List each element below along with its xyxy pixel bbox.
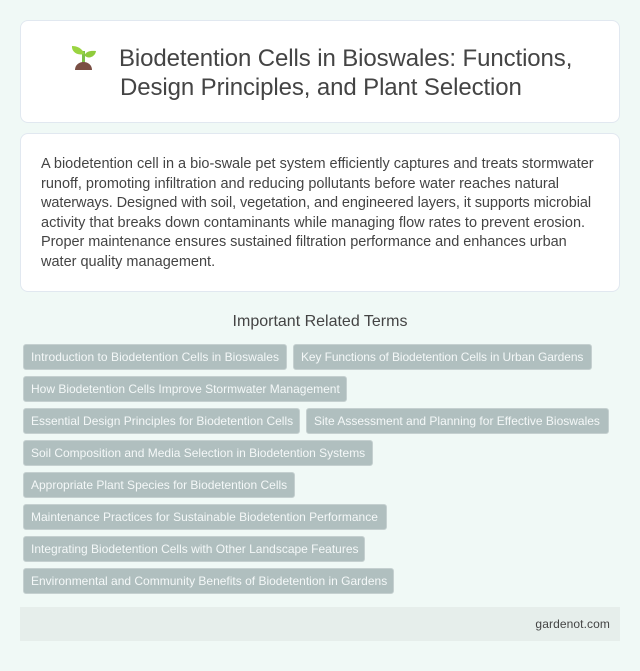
- chip: Integrating Biodetention Cells with Other Landscape Features: [31, 542, 359, 556]
- chip: [23, 568, 394, 594]
- chip: Introduction to Biodetention Cells in Bioswales: [31, 350, 279, 364]
- chip: [23, 344, 287, 370]
- header card: [20, 20, 620, 123]
- chip: [23, 472, 295, 498]
- chip: [23, 376, 347, 402]
- intro paragraph: A biodetention cell in a bio-swale pet system efficiently captures and treats stormwater: [41, 156, 594, 172]
- intro paragraph: activity that breaks down contaminants while managing flow rates to prevent erosion.: [41, 215, 585, 231]
- title: Biodetention Cells in Bioswales: Functions,: [119, 45, 572, 72]
- chip: Environmental and Community Benefits of Biodetention in Gardens: [31, 574, 387, 588]
- related terms chips: [23, 344, 609, 594]
- icon: seedling: [72, 46, 96, 70]
- chip: [306, 408, 609, 434]
- chip: How Biodetention Cells Improve Stormwater Management: [31, 382, 340, 396]
- intro paragraph: runoff, promoting infiltration and reducing pollutants before water reaches natural: [41, 176, 559, 192]
- intro paragraph: waterways. Designed with soil, vegetation, and engineered layers, it supports microbial: [41, 195, 591, 211]
- intro paragraph: [41, 156, 594, 270]
- intro text card: [20, 133, 620, 292]
- title: [119, 45, 572, 101]
- chip: Soil Composition and Media Selection in Biodetention Systems: [31, 446, 365, 460]
- intro paragraph: water quality management.: [41, 254, 215, 270]
- chip: Maintenance Practices for Sustainable Biodetention Performance: [31, 510, 378, 524]
- chip: [23, 504, 387, 530]
- chip: [23, 536, 365, 562]
- chip: [23, 408, 300, 434]
- title: Design Principles, and Plant Selection: [120, 74, 522, 101]
- footer source: gardenot.com: [535, 617, 610, 631]
- chip: [23, 440, 373, 466]
- chip: [293, 344, 592, 370]
- chip: Appropriate Plant Species for Biodetention Cells: [31, 478, 287, 492]
- chip: Key Functions of Biodetention Cells in Urban Gardens: [301, 350, 583, 364]
- related terms heading: Important Related Terms: [233, 313, 407, 330]
- chip: Essential Design Principles for Biodetention Cells: [31, 414, 293, 428]
- footer bar: [20, 607, 620, 641]
- intro paragraph: Proper maintenance ensures sustained filtration performance and enhances urban: [41, 234, 567, 250]
- chip: Site Assessment and Planning for Effective Bioswales: [314, 414, 600, 428]
